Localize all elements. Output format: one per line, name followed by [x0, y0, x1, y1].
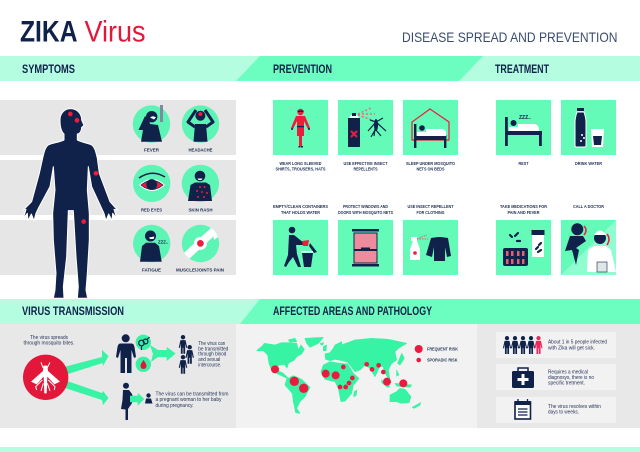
label: RED EYES	[141, 208, 162, 212]
fact: duration	[496, 397, 616, 423]
card: rest	[496, 100, 551, 166]
icon: fatigue	[133, 225, 170, 272]
card: clothing repellent: FOR CLOTHING	[416, 210, 445, 215]
icon: gender symbols	[136, 335, 151, 350]
legend	[415, 345, 459, 362]
panel: symptoms	[0, 100, 236, 298]
card: drink water	[561, 100, 616, 166]
arrow: blood and sexual	[150, 345, 176, 362]
text: blood transmission: The virus can	[198, 341, 225, 347]
fact: 1 in 5	[496, 332, 616, 358]
legend: SPORADIC RISK	[427, 358, 458, 362]
icon: baby	[145, 393, 152, 404]
heading: virus transmission: VIRUS TRANSMISSION	[22, 304, 124, 318]
text: pregnancy transmission: a pregnant woman to her baby	[156, 397, 222, 403]
fact: 1 in 5: with Zika will get sick.	[548, 346, 595, 352]
label: SKIN RASH	[188, 208, 212, 212]
heading: symptoms: SYMPTOMS	[22, 62, 75, 76]
card: medications: PAIN AND FEVER	[508, 210, 540, 215]
caption: SLEEP UNDER MOSQUITO	[406, 161, 456, 166]
arrow: upper	[64, 350, 108, 374]
card: containers: THAT HOLDS WATER	[281, 210, 321, 215]
icon: blood drop	[136, 357, 151, 372]
text: mosquito bites: The virus spreads	[30, 335, 68, 341]
title	[20, 16, 146, 48]
card: window nets: PROTECT WINDOWS AND	[343, 204, 388, 209]
label: HEADACHE	[188, 148, 213, 152]
label: FATIGUE	[142, 268, 161, 272]
card: window nets	[338, 204, 393, 275]
icon: fatigue: ZZZ..	[158, 240, 168, 244]
card: call a doctor	[561, 204, 616, 275]
icon: group of people	[179, 335, 194, 374]
icon: fever	[133, 105, 170, 152]
heading: affected areas: AFFECTED AREAS AND PATHOLOGY	[273, 304, 432, 318]
top header band	[0, 56, 640, 81]
card: clothing: SHIRTS, TROUSERS, HATS	[276, 166, 326, 172]
panel: affected areas	[236, 324, 477, 428]
card: medications	[496, 204, 551, 275]
icon: skin rash	[182, 165, 219, 212]
heading: treatment: TREATMENT	[495, 62, 549, 76]
text: blood transmission: and sexual	[198, 357, 220, 363]
icon: red eyes	[133, 165, 170, 212]
icon: pregnant woman	[121, 383, 133, 420]
text: blood transmission: intercourse.	[198, 362, 221, 368]
card: containers	[273, 204, 328, 275]
icon: mosquito	[23, 355, 68, 400]
text: mosquito bites: through mosquito bites.	[24, 340, 74, 346]
card: rest: ZZZ..	[519, 115, 532, 121]
card: medications: TAKE MEDICATIONS FOR	[500, 204, 548, 209]
fact: diagnosis: diagnosys, there is no	[548, 375, 594, 381]
card: containers: EMPTY/CLEAN CONTAINERS	[273, 204, 328, 209]
panel: prevention	[273, 100, 458, 275]
world map	[257, 337, 421, 413]
text: pregnancy transmission: during pregnancy.	[156, 403, 194, 409]
arrow: lower	[65, 381, 108, 405]
title: Virus	[84, 16, 146, 48]
card: clothing	[273, 100, 328, 172]
card: bed net: NETS ON BEDS	[416, 166, 445, 172]
card: repellent: REPELLENTS	[354, 166, 378, 172]
fact: 1 in 5: About 1 in 5 people infected	[548, 340, 607, 346]
text: blood transmission: be transmitted	[198, 346, 228, 352]
card: repellent	[338, 100, 393, 172]
bottom header band	[0, 299, 640, 324]
text: pregnancy transmission: The virus can be transmitted from	[156, 392, 228, 398]
panel: treatment	[496, 100, 616, 275]
text: blood transmission: through blood	[198, 352, 226, 358]
caption: DRINK WATER	[575, 161, 603, 166]
arrow: to baby	[130, 393, 144, 406]
label: MUSCLE/JOINTS PAIN	[176, 268, 224, 272]
icon: headache	[182, 105, 219, 152]
heading: prevention: PREVENTION	[273, 62, 332, 76]
panel: pathology facts	[477, 324, 640, 428]
fact: diagnosis	[496, 364, 616, 390]
fact: duration: days to weeks.	[548, 410, 579, 416]
fact: diagnosis: specific tretment.	[548, 380, 585, 386]
card: clothing repellent: USE INSECT REPELLENT	[408, 204, 454, 209]
label: FEVER	[144, 148, 160, 152]
card: clothing repellent	[403, 204, 458, 275]
text: blood transmission	[198, 341, 228, 368]
legend: FREQUENT RISK	[427, 346, 459, 352]
footer band	[0, 447, 640, 452]
text: pregnancy transmission	[156, 392, 228, 409]
icon: adult person	[116, 334, 136, 373]
fact: diagnosis: Requires a medical	[548, 370, 588, 376]
text: mosquito bites	[24, 335, 74, 346]
title: ZIKA	[20, 16, 78, 48]
fact: duration: The virus resolves within	[548, 404, 601, 410]
card: call a doctor: CALL A DOCTOR	[573, 204, 605, 209]
card: window nets: DOORS WITH MOSQUITO NETS	[338, 210, 393, 215]
body silhouette	[23, 109, 117, 298]
card: bed net	[403, 100, 458, 172]
panel: virus transmission	[0, 324, 236, 428]
caption: WEAR LONG SLEEVED	[280, 161, 322, 166]
icon: muscle joints pain	[176, 225, 224, 272]
caption: USE EFFECTIVE INSECT	[344, 161, 388, 166]
caption: REST	[518, 161, 529, 166]
